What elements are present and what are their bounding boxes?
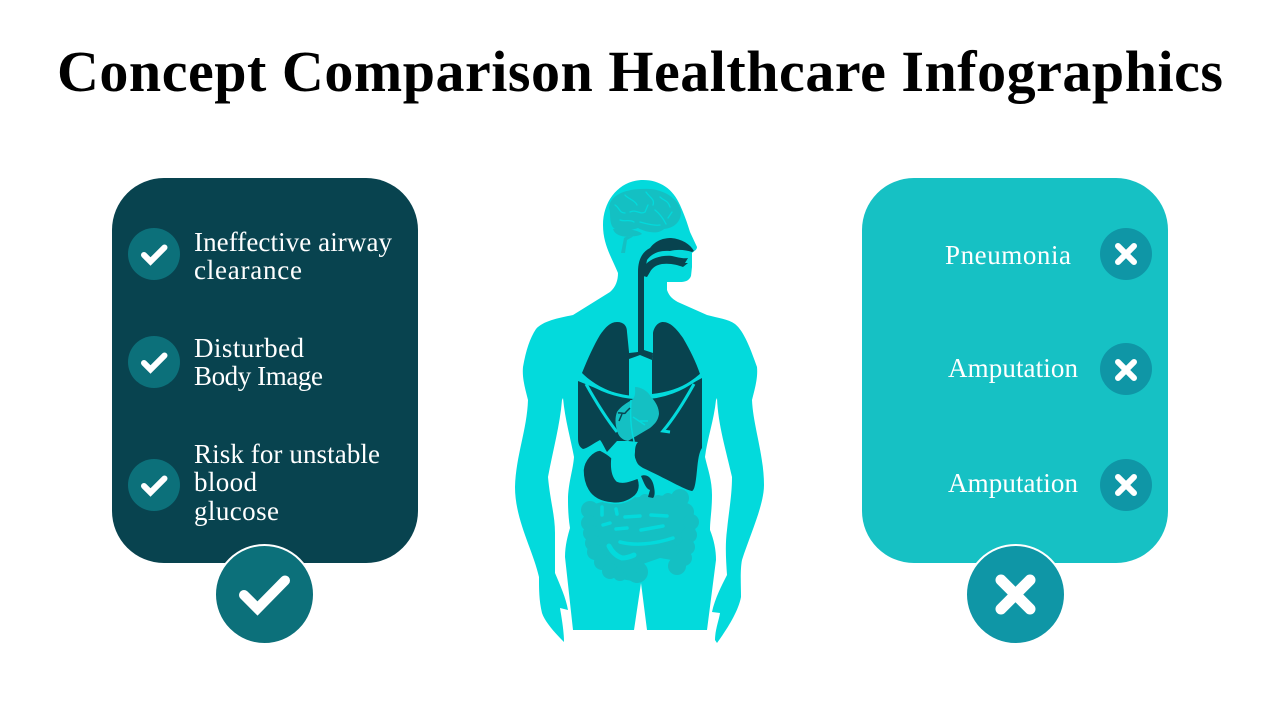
- item: amputation: Amputation: [948, 353, 1078, 383]
- left lung: [582, 322, 629, 396]
- item: risk for unstable blood glucose: [128, 439, 380, 526]
- title: Concept Comparison Healthcare Infographics: [57, 39, 1223, 104]
- item: ineffective airway clearance: clearance: [194, 255, 302, 285]
- icon: large check badge: [215, 545, 314, 644]
- item: amputation: [948, 343, 1152, 395]
- item: disturbed body image: Body Image: [194, 361, 323, 391]
- stomach: [583, 450, 639, 503]
- heart and liver: [616, 387, 659, 441]
- item: ineffective airway clearance: [128, 227, 392, 285]
- duodenum: [641, 475, 655, 498]
- item: risk for unstable blood glucose: Risk for unstable: [194, 439, 380, 469]
- human body anatomy illustration: [515, 180, 764, 643]
- airway and trachea: [629, 238, 694, 360]
- item: pneumonia: Pneumonia: [945, 240, 1071, 270]
- item: pneumonia: [945, 228, 1152, 280]
- intestine gaps: [602, 507, 673, 558]
- diaphragm and rib bands: [580, 375, 701, 432]
- panel: negative concept: [862, 178, 1168, 563]
- panel: positive concept: [112, 178, 418, 563]
- item: disturbed body image: Disturbed: [194, 333, 304, 363]
- heart vessel lines: [631, 400, 648, 466]
- lower thorax organs: [578, 378, 702, 491]
- body silhouette: [515, 180, 764, 643]
- brain: [609, 189, 681, 253]
- item: amputation second: Amputation: [948, 468, 1078, 498]
- item: disturbed body image: [128, 333, 323, 391]
- item: ineffective airway clearance: Ineffective airway: [194, 227, 392, 257]
- heart dark vessels: [618, 408, 630, 421]
- intestines: [581, 489, 699, 583]
- item: risk for unstable blood glucose: glucose: [194, 496, 279, 526]
- item: risk for unstable blood glucose: blood: [194, 467, 258, 497]
- right lung: [652, 322, 700, 394]
- item: amputation second: [948, 459, 1152, 511]
- icon: large cross badge: [966, 545, 1065, 644]
